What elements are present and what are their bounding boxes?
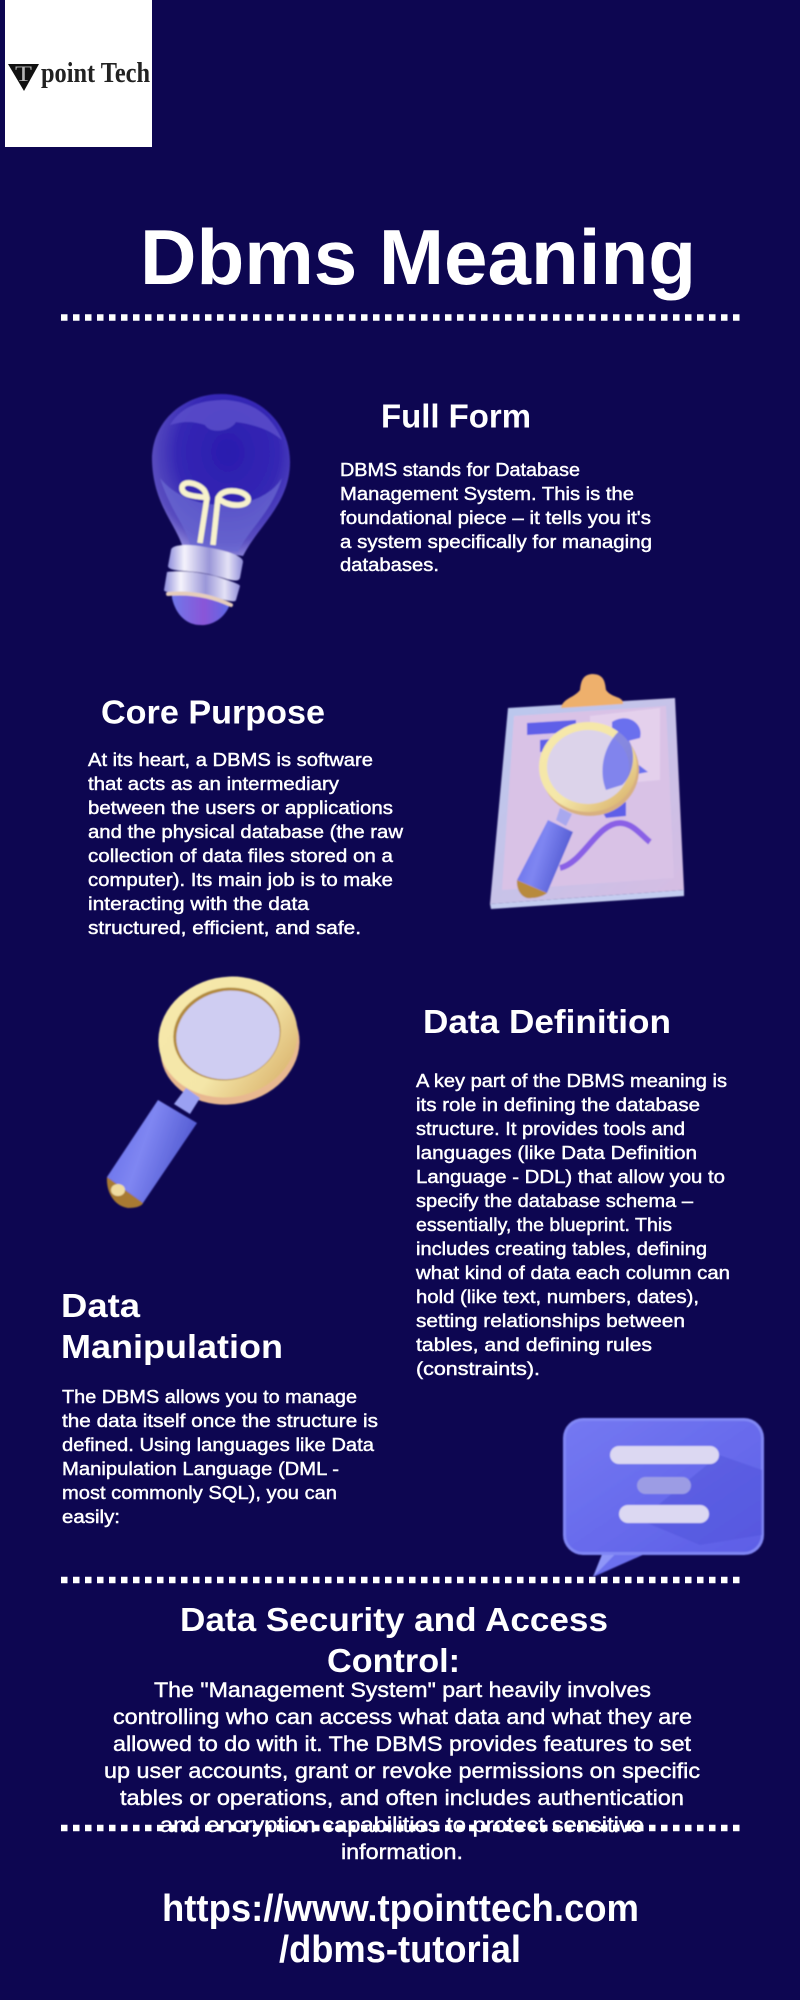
- text: data definition body: hold (like text, numbers, dates),: [416, 1286, 699, 1307]
- text: data manipulation body: the data itself once the structure is: [62, 1410, 378, 1431]
- text: data security body: and encryption capabilities to protect sensitive: [160, 1813, 644, 1837]
- text: full form body: a system specifically for managing: [340, 531, 652, 552]
- text: full form body: [340, 459, 652, 575]
- text: full form body: databases.: [340, 554, 439, 575]
- text: data definition body: setting relationships between: [416, 1310, 685, 1331]
- section: full form: [340, 398, 652, 575]
- heading: data security: [180, 1601, 608, 1679]
- text: data manipulation body: defined. Using languages like Data: [62, 1434, 375, 1455]
- text: full form body: foundational piece – it tells you it's: [340, 507, 651, 528]
- logo: Tpoint Tech: T: [15, 61, 33, 86]
- text: data manipulation body: [62, 1386, 378, 1527]
- text: data security body: up user accounts, grant or revoke permissions on specific: [104, 1759, 700, 1783]
- text: core purpose body: and the physical database (the raw: [88, 821, 404, 842]
- text: core purpose body: [88, 749, 404, 938]
- text: data definition body: A key part of the DBMS meaning is: [416, 1070, 727, 1091]
- text: data security body: The "Management System" part heavily involves: [154, 1678, 651, 1702]
- text: data definition body: (constraints).: [416, 1358, 540, 1379]
- heading: full form: Full Form: [381, 398, 531, 434]
- text: data security body: information.: [341, 1840, 463, 1864]
- text: data security body: allowed to do with it. The DBMS provides features to set: [113, 1732, 691, 1756]
- section: core purpose: [88, 694, 404, 938]
- heading: data manipulation: Data: [61, 1287, 141, 1324]
- text: full form body: DBMS stands for Database: [340, 459, 580, 480]
- text: data manipulation body: The DBMS allows you to manage: [62, 1386, 357, 1407]
- text: data definition body: essentially, the blueprint. This: [416, 1214, 672, 1235]
- text: data definition body: Language - DDL) that allow you to: [416, 1166, 725, 1187]
- url footer: https://www.tpointtech.com: [162, 1888, 639, 1930]
- text: core purpose body: computer). Its main job is to make: [88, 869, 393, 890]
- text: data manipulation body: easily:: [62, 1506, 120, 1527]
- url footer: /dbms-tutorial: [279, 1929, 521, 1971]
- icon: clipboard with magnifier: [490, 674, 684, 909]
- heading: core purpose: Core Purpose: [101, 694, 325, 730]
- section: data manipulation: [61, 1287, 378, 1527]
- title: Dbms Meaning: [140, 213, 696, 301]
- logo: Tpoint Tech: point Tech: [41, 57, 150, 89]
- text: data definition body: tables, and defining rules: [416, 1334, 652, 1355]
- text: data security body: [104, 1678, 700, 1864]
- section: data definition: [415, 1003, 730, 1379]
- heading: data security: Control:: [327, 1642, 460, 1679]
- icon: magnifying glass: [107, 964, 311, 1208]
- text: core purpose body: structured, efficient, and safe.: [88, 917, 361, 938]
- heading: data definition: Data Definition: [423, 1003, 671, 1040]
- text: core purpose body: collection of data files stored on a: [88, 845, 394, 866]
- heading: data manipulation: Manipulation: [61, 1328, 283, 1365]
- heading: data manipulation: [61, 1287, 283, 1365]
- text: data definition body: includes creating tables, defining: [416, 1238, 707, 1259]
- text: data definition body: what kind of data each column can: [415, 1262, 730, 1283]
- text: data definition body: [415, 1070, 730, 1379]
- text: data manipulation body: Manipulation Language (DML -: [62, 1458, 339, 1479]
- text: core purpose body: that acts as an intermediary: [88, 773, 340, 794]
- icon: light bulb: [152, 394, 290, 625]
- text: data definition body: structure. It provides tools and: [416, 1118, 685, 1139]
- url footer: [162, 1888, 639, 1971]
- text: core purpose body: At its heart, a DBMS is software: [88, 749, 373, 770]
- text: data security body: controlling who can access what data and what they are: [113, 1705, 692, 1729]
- text: data definition body: languages (like Data Definition: [416, 1142, 697, 1163]
- logo: Tpoint Tech: [5, 0, 152, 147]
- text: data definition body: specify the database schema –: [416, 1190, 694, 1211]
- text: data security body: tables or operations, and often includes authentication: [120, 1786, 684, 1810]
- text: data definition body: its role in defining the database: [416, 1094, 700, 1115]
- heading: data security: Data Security and Access: [180, 1601, 608, 1638]
- section: data security and access control: [104, 1601, 700, 1864]
- text: full form body: Management System. This is the: [340, 483, 634, 504]
- text: core purpose body: between the users or applications: [88, 797, 393, 818]
- icon: speech bubble: [563, 1418, 764, 1577]
- text: data manipulation body: most commonly SQL), you can: [62, 1482, 337, 1503]
- text: core purpose body: interacting with the data: [88, 893, 310, 914]
